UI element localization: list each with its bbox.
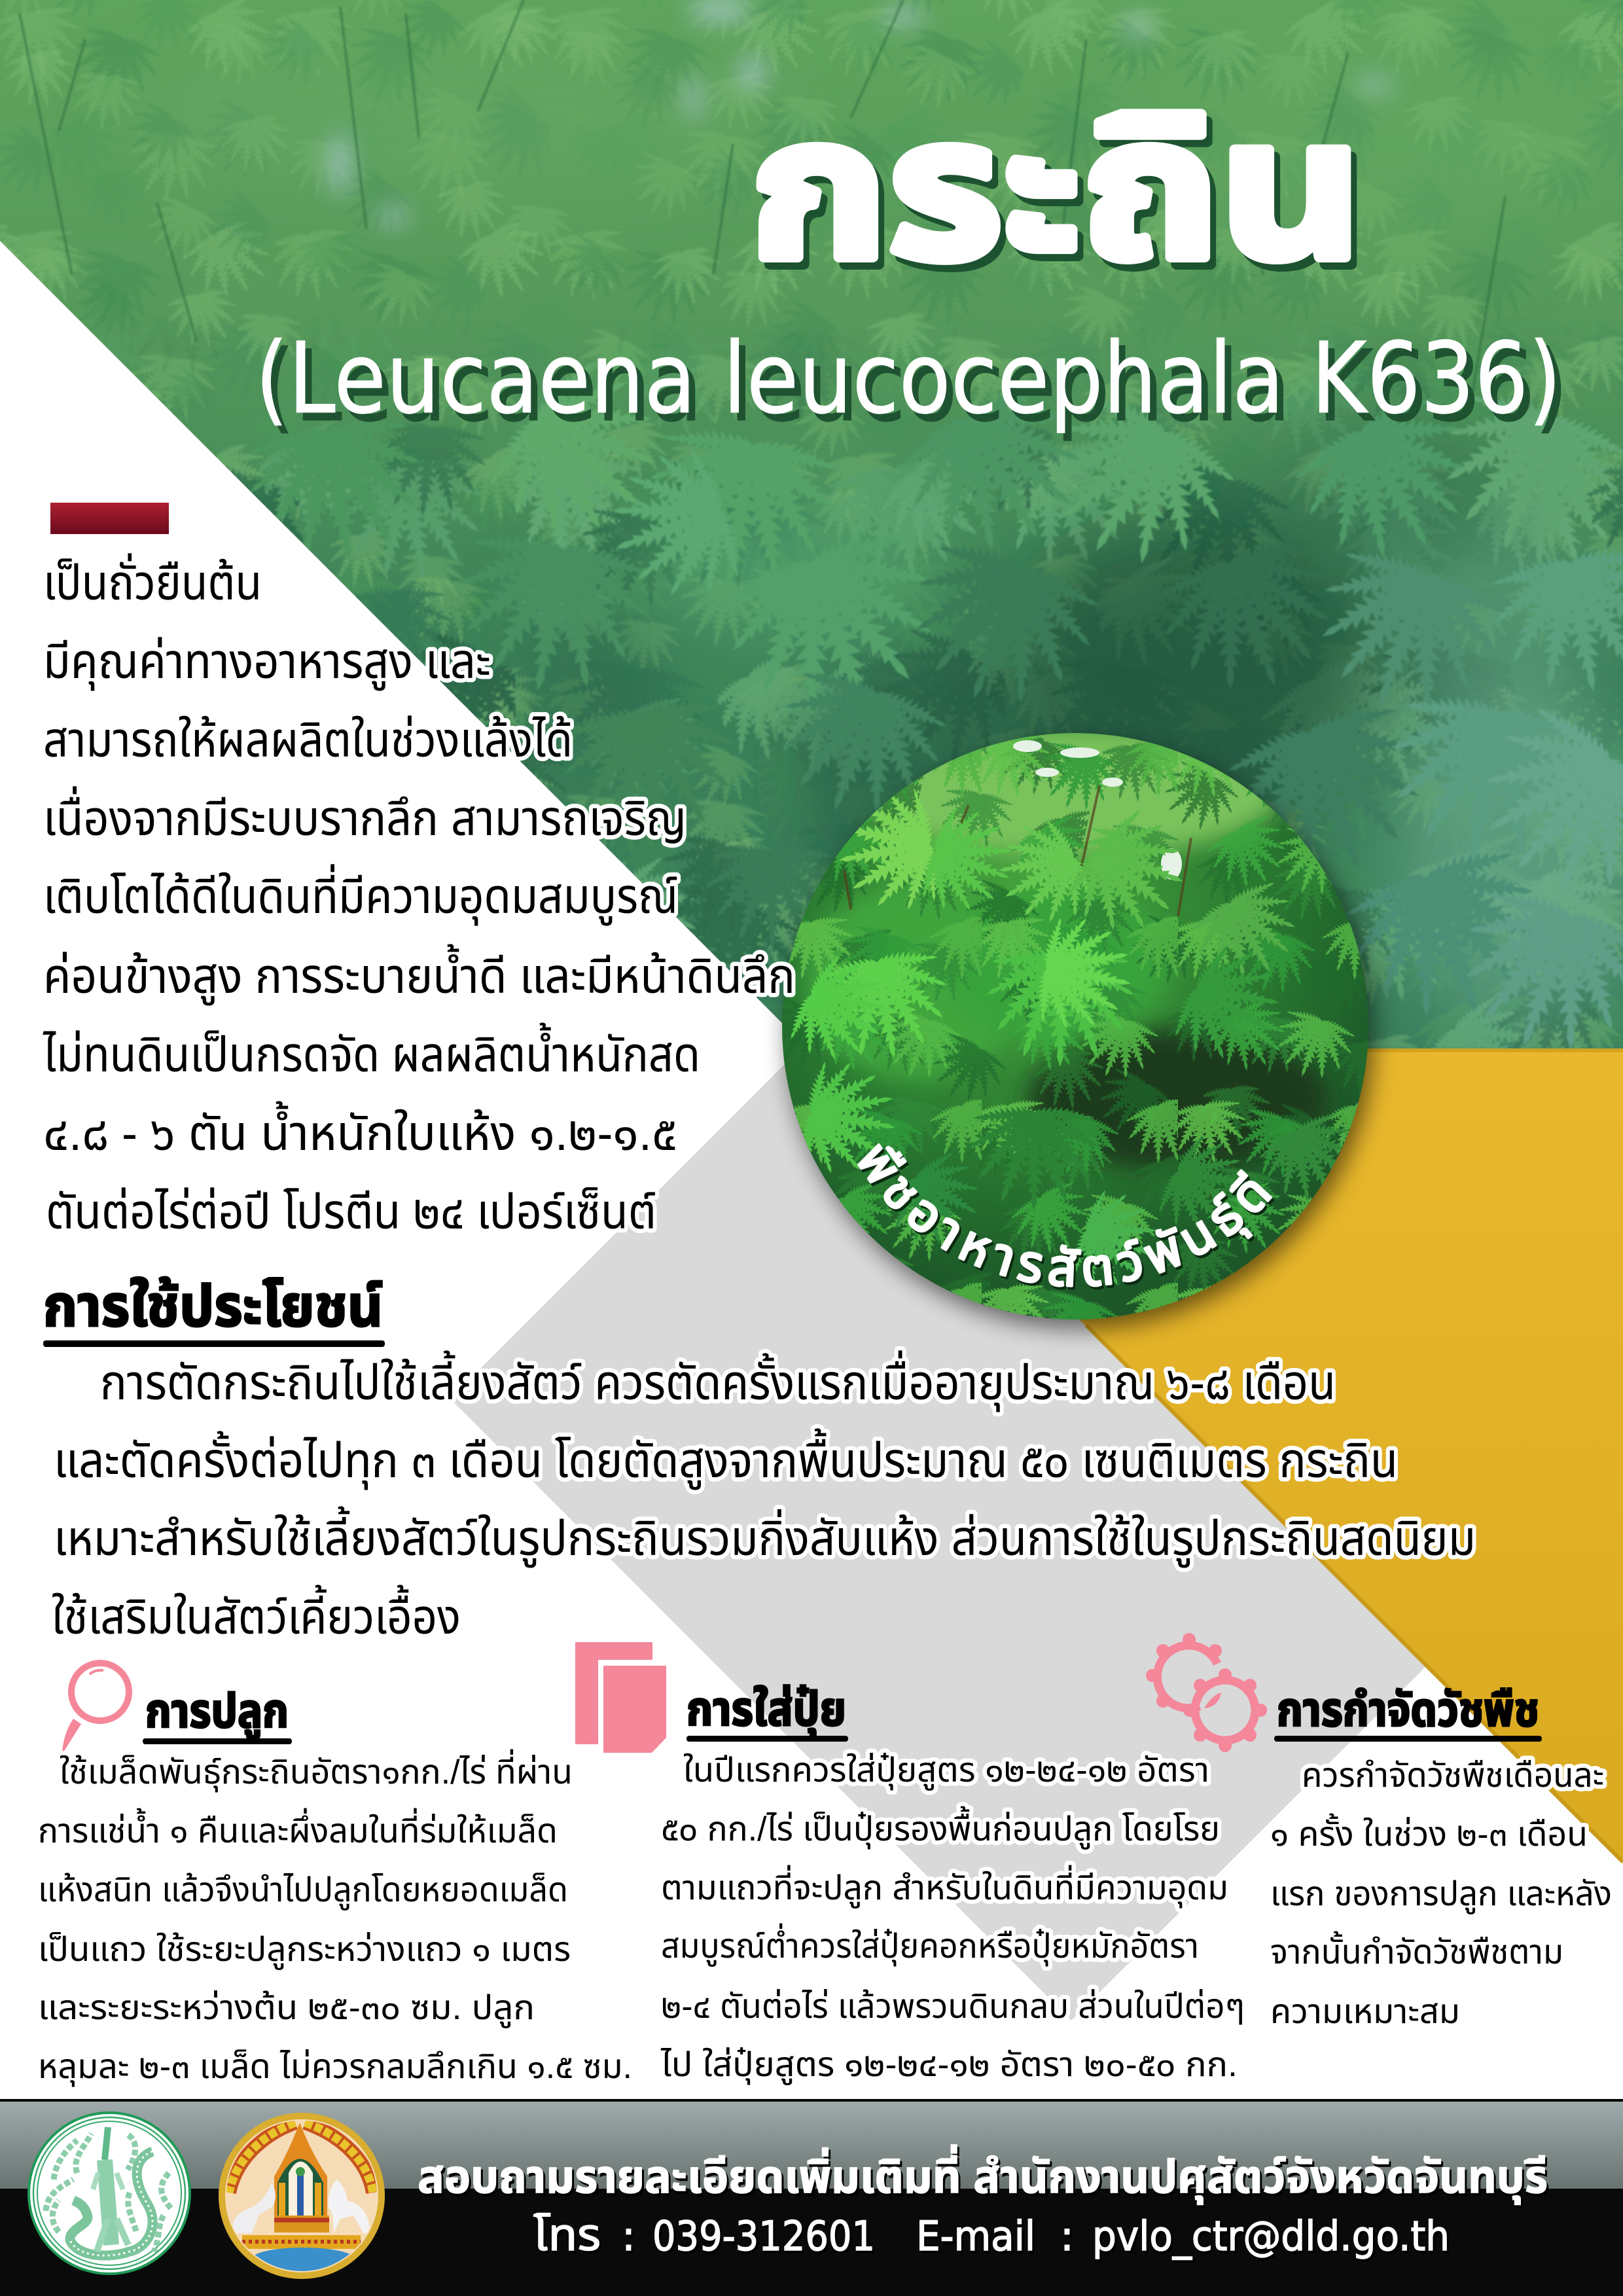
red marker bar: [50, 503, 169, 534]
heading: planting: การปลูก: [145, 1685, 289, 1740]
fertilizing text: สมบูรณ์ต่ำควรใส่ปุ๋ยคอกหรือปุ๋ยหมักอัตรา: [661, 1923, 1199, 1967]
weed control text: แรก ของการปลูก และหลัง: [1270, 1875, 1612, 1914]
planting text: [38, 1749, 632, 2087]
title: Thai name: กระถิน: [750, 79, 1363, 299]
planting text: แห้งสนิท แล้วจึงนำไปปลูกโดยหยอดเมล็ด: [38, 1871, 568, 1910]
intro text block: [43, 553, 795, 1239]
footer contact text: E-mail: [916, 2212, 1035, 2260]
icon: gears: [1146, 1633, 1267, 1752]
fertilizing text: ๕๐ กก./ไร่ เป็นปุ๋ยรองพื้นก่อนปลูก โดยโรย: [661, 1806, 1220, 1850]
benefits paragraph: การตัดกระถินไปใช้เลี้ยงสัตว์ ควรตัดครั้งแรกเมื่ออายุประมาณ ๖-๘ เดือน: [100, 1350, 1336, 1412]
heading: benefits: การใช้ประโยชน์: [43, 1274, 383, 1338]
benefits paragraph: [52, 1350, 1476, 1644]
planting text: และระยะระหว่างต้น ๒๕-๓๐ ซม. ปลูก: [38, 1989, 535, 2028]
intro text block: เติบโตได้ดีในดินที่มีความอุดมสมบูรณ์: [43, 864, 678, 925]
background photo: leucaena foliage: [0, 0, 1623, 1079]
intro text block: สามารถให้ผลผลิตในช่วงแล้งได้: [43, 713, 573, 767]
icon: magnifier: [62, 1663, 129, 1754]
planting text: ใช้เมล็ดพันธุ์กระถินอัตรา๑กก./ไร่ ที่ผ่าน: [60, 1749, 573, 1793]
intro text block: เป็นถั่วยืนต้น: [43, 553, 262, 610]
weed control text: ความเหมาะสม: [1270, 1993, 1460, 2031]
benefits paragraph: และตัดครั้งต่อไปทุก ๓ เดือน โดยตัดสูงจากพื้นประมาณ ๕๐ เซนติเมตร กระถิน: [54, 1428, 1398, 1490]
footer contact text: สอบถามรายละเอียดเพิ่มเติมที่ สำนักงานปศุสัตว์จังหวัดจันทบุรี: [418, 2145, 1548, 2204]
heading: weed control: การกำจัดวัชพืช: [1277, 1684, 1539, 1736]
fertilizing text: ไป ใส่ปุ๋ยสูตร ๑๒-๒๔-๑๒ อัตรา ๒๐-๕๐ กก.: [660, 2046, 1238, 2085]
fertilizing text: ในปีแรกควรใส่ปุ๋ยสูตร ๑๒-๒๔-๑๒ อัตรา: [683, 1751, 1209, 1791]
planting text: หลุมละ ๒-๓ เมล็ด ไม่ควรกลมลึกเกิน ๑.๕ ซม.: [38, 2048, 632, 2087]
fertilizing text: [660, 1751, 1245, 2085]
intro text block: ไม่ทนดินเป็นกรดจัด ผลผลิตน้ำหนักสด: [43, 1022, 700, 1082]
weed control text: จากนั้นกำจัดวัชพืชตาม: [1270, 1931, 1563, 1971]
fertilizing text: ๒-๔ ตันต่อไร่ แล้วพรวนดินกลบ ส่วนในปีต่อๆ: [661, 1988, 1245, 2026]
footer contact text: :: [622, 2212, 635, 2260]
gray diagonal panel: [450, 1044, 1427, 2020]
circular plant photo: [770, 730, 1390, 1345]
intro text block: เนื่องจากมีระบบรากลึก สามารถเจริญ: [43, 786, 687, 846]
curved caption on photo: พืชอาหารสัตว์พันธุ์ดี: [857, 1143, 1274, 1290]
intro text block: ตันต่อไร่ต่อปี โปรตีน ๒๔ เปอร์เซ็นต์: [46, 1185, 656, 1239]
planting text: การแช่น้ำ ๑ คืนและผึ่งลมในที่ร่มให้เมล็ด: [38, 1808, 558, 1850]
yellow corner panel: [808, 1049, 1623, 1862]
footer contact text: 039-312601: [652, 2212, 875, 2260]
footer contact text: pvlo_ctr@dld.go.th: [1092, 2212, 1450, 2260]
weed control text: ๑ ครั้ง ในช่วง ๒-๓ เดือน: [1270, 1813, 1588, 1854]
planting text: เป็นแถว ใช้ระยะปลูกระหว่างแถว ๑ เมตร: [38, 1931, 571, 1970]
footer contact text: :: [1060, 2212, 1074, 2260]
icon: documents: [575, 1642, 670, 1757]
intro text block: ๔.๘ - ๖ ตัน น้ำหนักใบแห้ง ๑.๒-๑.๕: [43, 1101, 677, 1160]
footer contact text: โทร: [533, 2210, 601, 2260]
weed control text: [1270, 1757, 1612, 2031]
logo: gold emblem: [219, 2113, 385, 2279]
intro text block: มีคุณค่าทางอาหารสูง และ: [43, 634, 491, 691]
weed control text: ควรกำจัดวัชพืชเดือนละ: [1302, 1757, 1604, 1795]
benefits paragraph: ใช้เสริมในสัตว์เคี้ยวเอื้อง: [52, 1585, 461, 1644]
heading: fertilizing: การใส่ปุ๋ย: [687, 1683, 846, 1738]
footer contact text: [418, 2145, 1548, 2260]
fertilizing text: ตามแถวที่จะปลูก สำหรับในดินที่มีความอุดม: [661, 1865, 1228, 1909]
footer band: [0, 2099, 1623, 2296]
intro text block: ค่อนข้างสูง การระบายน้ำดี และมีหน้าดินลึก: [43, 944, 795, 1005]
logo: green emblem: [29, 2113, 190, 2274]
benefits paragraph: เหมาะสำหรับใช้เลี้ยงสัตว์ในรูปกระถินรวมกิ่งสับแห้ง ส่วนการใช้ในรูปกระถินสดนิยม: [54, 1506, 1476, 1568]
